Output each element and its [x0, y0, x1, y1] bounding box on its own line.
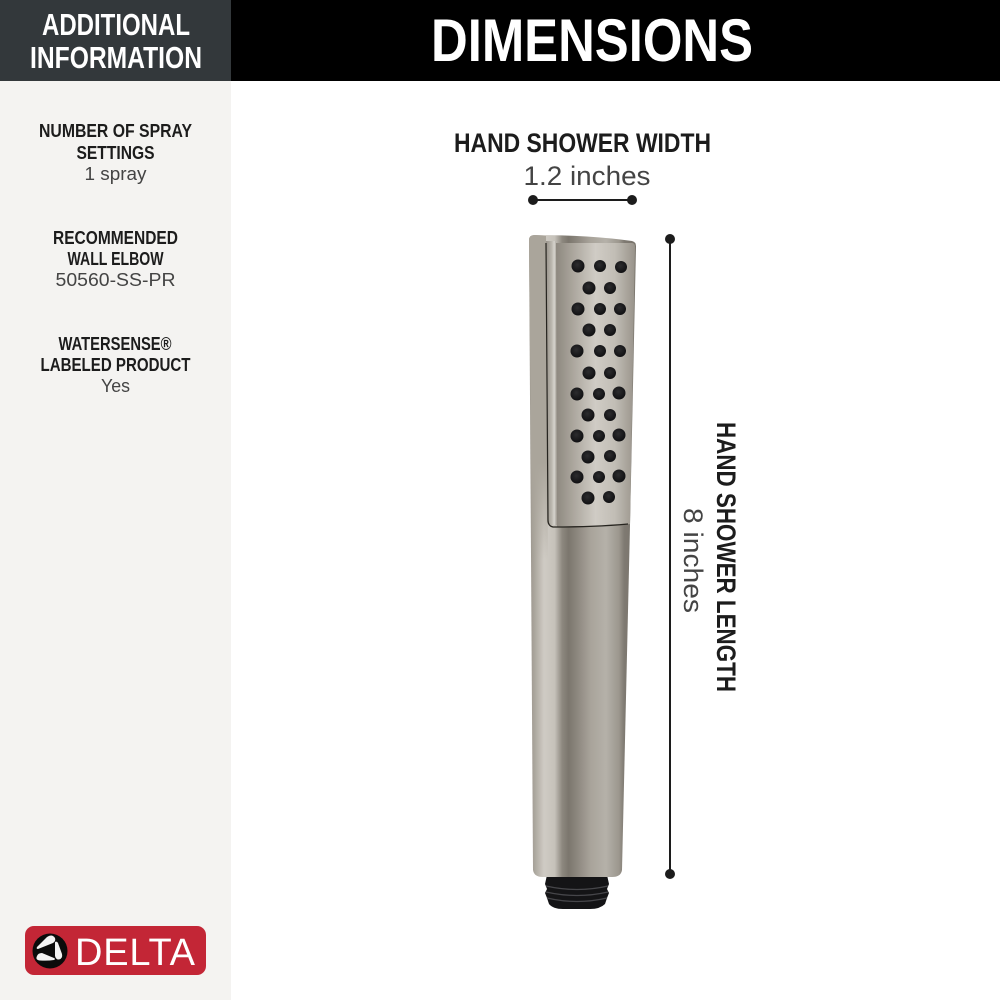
header: additional information: INFORMATION	[30, 40, 202, 75]
text block: recommended wall elbow: 50560-SS-PR	[56, 270, 176, 290]
icon: delta triangle mark	[32, 934, 68, 968]
label: hand shower length: 8 inches	[678, 508, 708, 613]
text block: number of spray settings: SETTINGS	[76, 143, 154, 163]
text block: watersense labeled product: LABELED PRODUCT	[40, 355, 191, 375]
title: dimensions	[231, 0, 1000, 81]
arrow: width dimension line	[528, 195, 637, 205]
label: hand shower width: 1.2 inches	[524, 161, 650, 191]
face seam	[546, 243, 628, 527]
header: additional information	[0, 0, 231, 81]
label: hand shower width	[454, 128, 711, 191]
label: hand shower length: HAND SHOWER LENGTH	[711, 422, 741, 692]
upper left strip	[529, 235, 548, 560]
label: hand shower width: HAND SHOWER WIDTH	[454, 128, 711, 158]
header: additional information: ADDITIONAL	[42, 7, 190, 42]
arrow: length dimension line	[665, 234, 675, 879]
body	[529, 235, 636, 877]
spray face	[556, 243, 635, 527]
text block: number of spray settings: NUMBER OF SPRAY	[39, 121, 192, 141]
panel: sidebar background	[0, 81, 231, 1000]
text block: recommended wall elbow: WALL ELBOW	[68, 249, 164, 269]
text block: watersense labeled product: WATERSENSE®	[58, 334, 172, 354]
side groove	[546, 241, 557, 525]
threaded connector	[545, 875, 609, 909]
text block: recommended wall elbow	[53, 228, 178, 290]
text block: watersense labeled product	[40, 334, 191, 396]
text block: recommended wall elbow: RECOMMENDED	[53, 228, 178, 248]
text block: watersense labeled product: Yes	[101, 376, 130, 396]
logo: delta: DELTA	[75, 932, 196, 974]
spray nozzles	[570, 260, 627, 504]
text block: number of spray settings: 1 spray	[84, 164, 146, 184]
text block: number of spray settings	[39, 121, 192, 184]
title: dimensions: DIMENSIONS	[431, 7, 753, 74]
label: hand shower length	[678, 422, 741, 692]
product: hand shower	[529, 235, 636, 909]
logo: delta	[25, 926, 206, 975]
